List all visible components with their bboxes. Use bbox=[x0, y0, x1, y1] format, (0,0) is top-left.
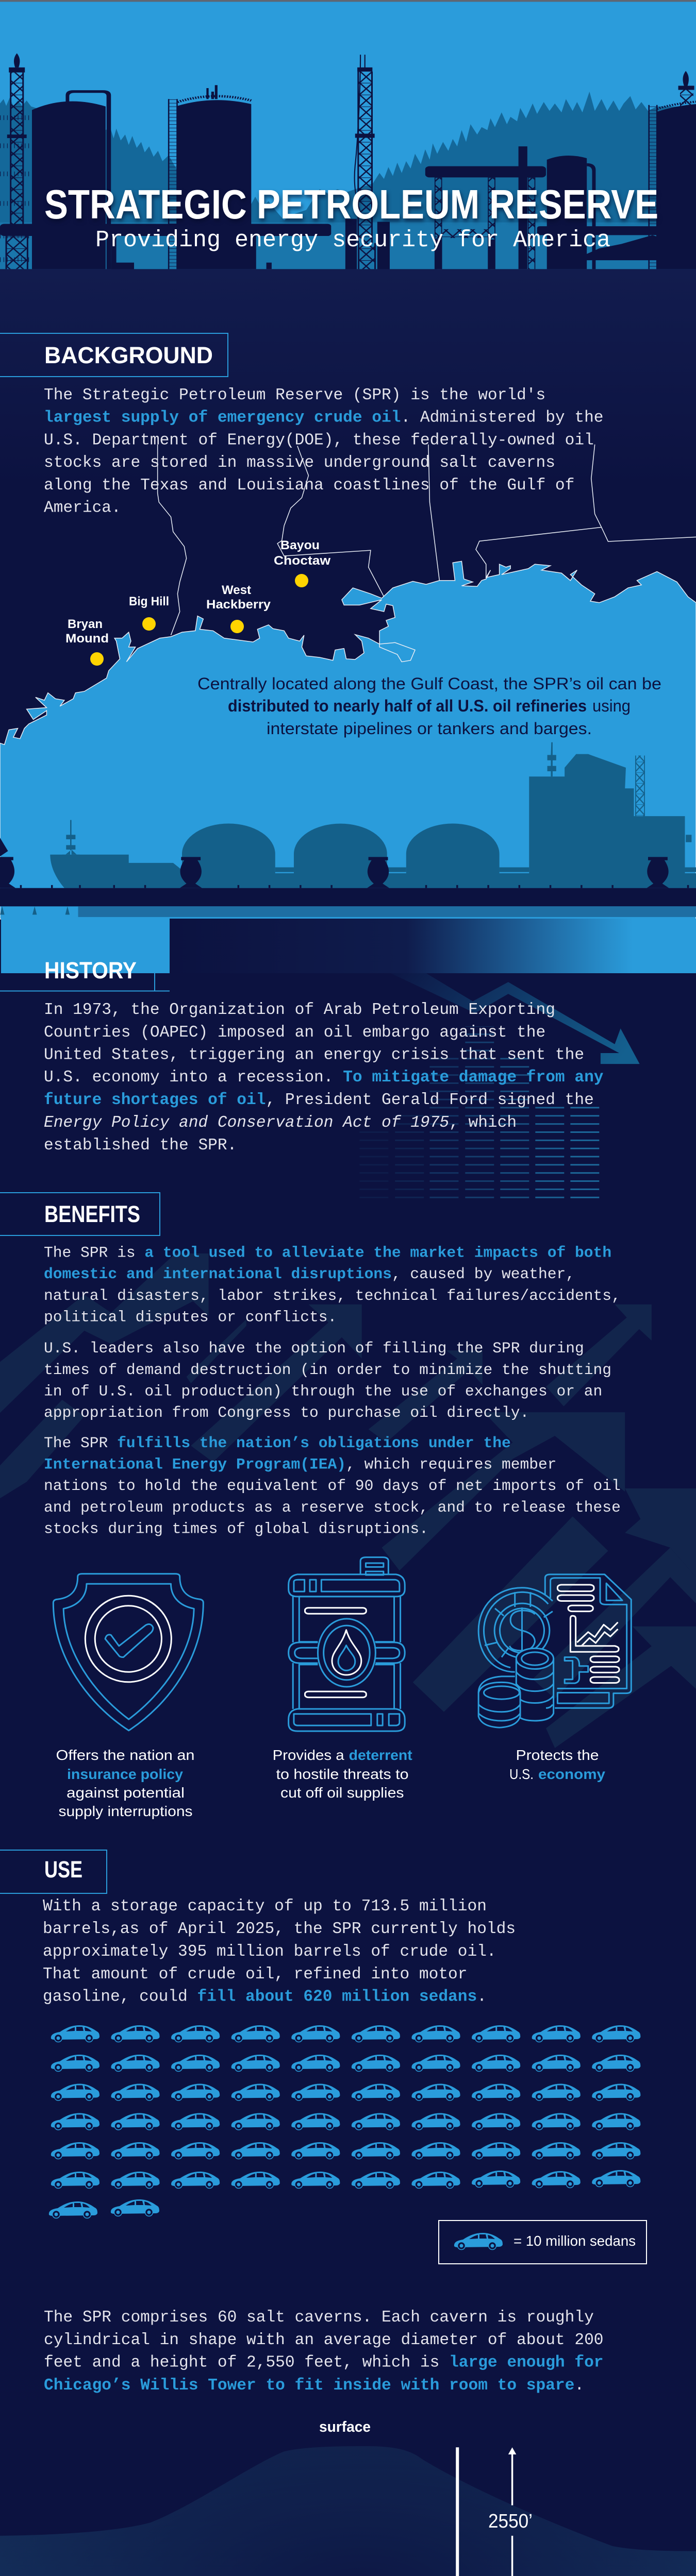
caption: insurance policy: insurance policy bbox=[67, 1766, 183, 1782]
icon: shield with checkmark bbox=[53, 1574, 203, 1731]
caption: deterrent bbox=[273, 1747, 412, 1801]
label: Bryan Mound: Bryan bbox=[68, 617, 103, 631]
left trestles bbox=[0, 115, 31, 262]
use text: barrels,as of April 2025, the SPR currently holds bbox=[43, 1920, 516, 1938]
label: Bayou Choctaw: Bayou bbox=[280, 538, 320, 552]
map: Gulf Coast bbox=[0, 445, 696, 919]
benefits text: paragraph 1: political disputes or conflicts. bbox=[44, 1309, 337, 1326]
history text: Countries (OAPEC) imposed an oil embargo against the bbox=[44, 1024, 545, 1042]
ladder 1 bbox=[169, 99, 177, 269]
caption: deterrent: to hostile threats to bbox=[276, 1766, 408, 1782]
benefits text: paragraph 2: appropriation from Congress to purchase oil directly. bbox=[44, 1404, 529, 1421]
history text: future shortages of oil, President Gerald Ford signed the bbox=[44, 1091, 594, 1109]
use text: gasoline, could fill about 620 million sedans. bbox=[43, 1988, 487, 2006]
marker: West Hackberry bbox=[230, 620, 244, 633]
history text: U.S. economy into a recession. To mitigate damage from any bbox=[44, 1069, 604, 1087]
salt dome hill bbox=[0, 2446, 696, 2576]
well pipe bbox=[456, 2447, 459, 2576]
history band bbox=[0, 917, 696, 991]
history text: established the SPR. bbox=[44, 1137, 237, 1155]
icon: oil barrel bbox=[289, 1557, 405, 1731]
marker: Bryan Mound bbox=[90, 652, 104, 666]
background text: along the Texas and Louisiana coastlines of the Gulf of bbox=[44, 477, 574, 495]
benefits decoration: rising arrows bbox=[0, 1253, 696, 1748]
benefits text: paragraph 1: domestic and international disruptions, caused by weather, bbox=[44, 1265, 575, 1283]
2550 dimension line bbox=[508, 2447, 516, 2576]
use text: approximately 395 million barrels of crude oil. bbox=[43, 1943, 496, 1961]
use text bbox=[43, 1897, 516, 2006]
label: surface: surface bbox=[319, 2419, 371, 2435]
map caption: using bbox=[592, 697, 631, 715]
label: Big Hill: Big Hill bbox=[129, 595, 169, 608]
tank 2 bbox=[177, 85, 251, 269]
benefits text: paragraph 2: times of demand destruction (in order to minimize the shutting bbox=[44, 1361, 611, 1379]
use heading bbox=[0, 1850, 107, 1893]
background heading: BACKGROUND bbox=[44, 342, 213, 368]
caption: insurance policy: against potential bbox=[67, 1785, 185, 1801]
legend: 10 million sedans bbox=[439, 2221, 647, 2264]
header illustration: refinery skyline bbox=[0, 0, 696, 488]
label: Bayou Choctaw: Choctaw bbox=[274, 554, 330, 568]
background text: U.S. Department of Energy(DOE), these federally-owned oil bbox=[44, 431, 594, 449]
history text: United States, triggering an energy crisis that sent the bbox=[44, 1046, 584, 1064]
benefits text: paragraph 3: nations to hold the equivalent of 90 days of net imports of oil bbox=[44, 1477, 621, 1495]
caption: deterrent: Provides a bbox=[273, 1747, 344, 1763]
cavern text bbox=[44, 2309, 604, 2395]
background text: stocks are stored in massive underground salt caverns bbox=[44, 454, 555, 472]
label: Bryan Mound bbox=[65, 617, 109, 646]
benefits text: paragraph 3: and petroleum products as a reserve stock, and to release these bbox=[44, 1499, 621, 1516]
pipeline bbox=[0, 857, 696, 906]
caption: economy bbox=[509, 1747, 605, 1782]
benefits text: paragraph 3: International Energy Program(IEA), which requires member bbox=[44, 1456, 557, 1473]
facility silhouette bbox=[50, 742, 696, 888]
history text bbox=[44, 1001, 604, 1155]
history heading: HISTORY bbox=[44, 957, 137, 984]
label: West Hackberry: West bbox=[222, 583, 251, 597]
label: 2550 feet: 2550’ bbox=[488, 2511, 533, 2532]
label: Bryan Mound: Mound bbox=[65, 632, 109, 646]
map caption: Centrally located along the Gulf Coast, the SPR’s oil can be bbox=[197, 674, 661, 693]
marker: Bayou Choctaw bbox=[295, 574, 308, 587]
caption: insurance policy: Offers the nation an bbox=[56, 1747, 195, 1763]
map site labels and markers bbox=[65, 538, 330, 666]
background text: America. bbox=[44, 499, 121, 517]
background text: largest supply of emergency crude oil. Administered by the bbox=[44, 409, 604, 427]
background text: The Strategic Petroleum Reserve (SPR) is the world's bbox=[44, 386, 545, 404]
cavern text: cylindrical in shape with an average diameter of about 200 bbox=[44, 2331, 604, 2349]
use text: With a storage capacity of up to 713.5 million bbox=[43, 1897, 487, 1916]
caption: deterrent: cut off oil supplies bbox=[280, 1785, 404, 1801]
cavern text: feet and a height of 2,550 feet, which is large enough for bbox=[44, 2354, 604, 2372]
cavern text: The SPR comprises 60 salt caverns. Each cavern is roughly bbox=[44, 2309, 594, 2327]
icon: financial document and coins bbox=[478, 1574, 631, 1727]
history text: In 1973, the Organization of Arab Petroleum Exporting bbox=[44, 1001, 555, 1019]
benefits text: paragraph 3: stocks during times of global disruptions. bbox=[44, 1520, 428, 1537]
pump piping and small tank bbox=[425, 146, 696, 269]
caption: economy: U.S. bbox=[509, 1766, 534, 1782]
cavern text: Chicago’s Willis Tower to fit inside with room to spare. bbox=[44, 2377, 584, 2395]
subtitle: Providing energy security for America bbox=[95, 227, 610, 253]
left pipe bbox=[0, 224, 331, 269]
map caption bbox=[197, 674, 661, 738]
caption: insurance policy: supply interruptions bbox=[59, 1803, 193, 1819]
benefits text: paragraph 3: The SPR fulfills the nation’s obligations under the bbox=[44, 1434, 511, 1452]
benefits heading bbox=[0, 1193, 160, 1235]
pictogram: 62 sedans bbox=[49, 2025, 640, 2218]
label: Bayou Choctaw bbox=[274, 538, 330, 568]
derrick 1 bbox=[6, 53, 27, 269]
use text: That amount of crude oil, refined into motor bbox=[43, 1965, 467, 1984]
benefits heading: BENEFITS bbox=[44, 1201, 140, 1227]
benefits text: paragraph 1: The SPR is a tool used to alleviate the market impacts of both bbox=[44, 1244, 611, 1261]
cavern chart bbox=[0, 2446, 696, 2576]
background heading bbox=[0, 333, 228, 377]
label: West Hackberry bbox=[206, 583, 271, 612]
chart labels bbox=[136, 2419, 533, 2576]
tank 1 with pipe bbox=[32, 90, 111, 269]
benefits text: paragraph 1: natural disasters, labor strikes, technical failures/accidents, bbox=[44, 1287, 621, 1304]
caption: deterrent: deterrent bbox=[349, 1747, 412, 1763]
benefits text: paragraph 2: in of U.S. oil production) through the use of exchanges or an bbox=[44, 1383, 602, 1400]
caption: economy: economy bbox=[538, 1766, 605, 1782]
legend: 10 million sedans: = 10 million sedans bbox=[513, 2233, 636, 2249]
derrick 2 bbox=[345, 55, 390, 269]
benefits text: paragraph 1 bbox=[44, 1244, 621, 1326]
benefits text: paragraph 3 bbox=[44, 1434, 621, 1537]
map caption: distributed to nearly half of all U.S. oil refineries bbox=[228, 697, 587, 715]
benefits text: paragraph 2: U.S. leaders also have the option of filling the SPR during bbox=[44, 1340, 584, 1357]
marker: Big Hill bbox=[142, 617, 156, 631]
gulf water bbox=[0, 561, 696, 919]
background text bbox=[44, 386, 604, 517]
benefits text: paragraph 2 bbox=[44, 1340, 611, 1421]
caption: economy: Protects the bbox=[516, 1747, 599, 1763]
derrick 3 and right tank bbox=[649, 71, 696, 269]
history decoration: falling chart bbox=[359, 973, 640, 1204]
label: West Hackberry: Hackberry bbox=[206, 598, 271, 612]
use heading: USE bbox=[44, 1856, 82, 1883]
caption: insurance policy bbox=[56, 1747, 195, 1819]
state borders bbox=[158, 445, 696, 635]
history text: Energy Policy and Conservation Act of 1975, which bbox=[44, 1114, 517, 1132]
map caption: interstate pipelines or tankers and barges. bbox=[267, 719, 592, 738]
